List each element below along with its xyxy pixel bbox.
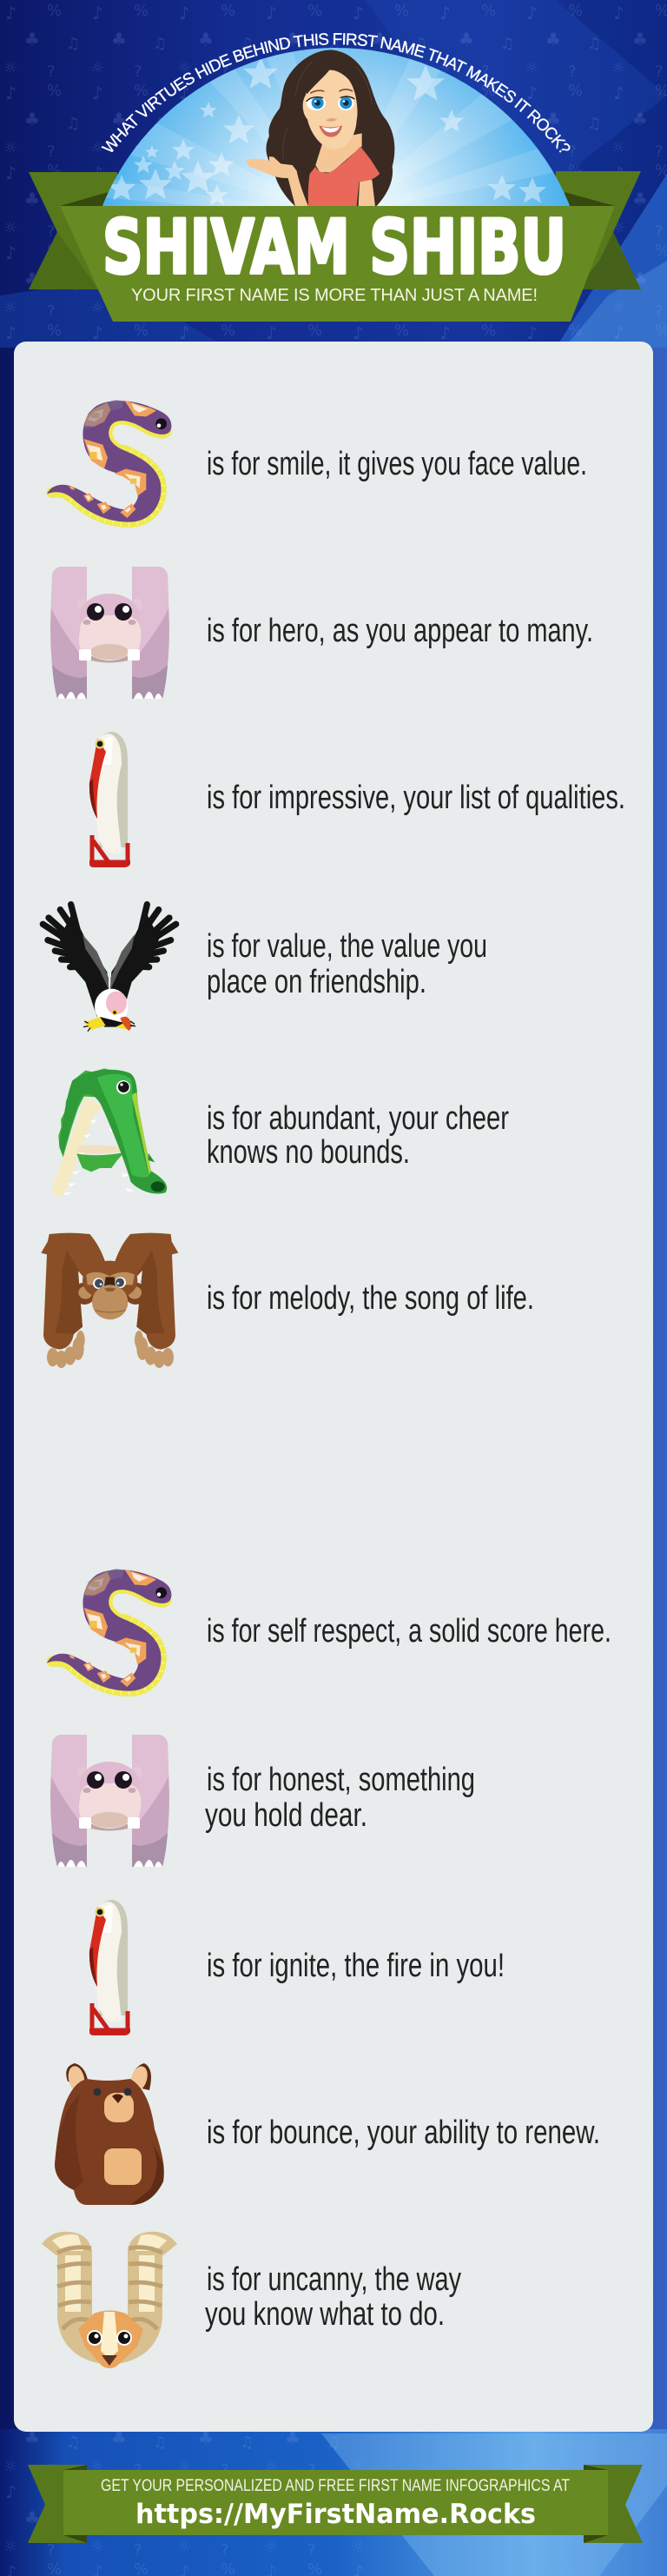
ribbon tails bbox=[29, 171, 641, 289]
row: M melody: is for melody, the song of life. bbox=[207, 1280, 534, 1317]
footer banner bbox=[28, 2465, 643, 2543]
sunburst dome bbox=[102, 48, 570, 206]
arm bbox=[246, 156, 308, 206]
row: H honest bbox=[50, 1735, 475, 1867]
row: H honest: is for honest, something bbox=[207, 1762, 475, 1798]
hair bbox=[266, 50, 394, 206]
row: U uncanny: is for uncanny, the way bbox=[207, 2261, 461, 2298]
neck and chest bbox=[315, 133, 362, 172]
row: U uncanny bbox=[42, 2232, 461, 2368]
row: I ignite: is for ignite, the fire in you! bbox=[207, 1948, 505, 1984]
row: H hero bbox=[50, 567, 593, 699]
row: A abundant bbox=[52, 1068, 509, 1197]
row: V value: is for value, the value you bbox=[207, 928, 487, 965]
row: S smile bbox=[47, 400, 587, 522]
footer line: GET YOUR PERSONALIZED AND FREE FIRST NAME INFOGRAPHICS AT bbox=[101, 2477, 570, 2495]
row: S self respect bbox=[47, 1569, 611, 1691]
nose bbox=[326, 118, 337, 122]
row: V value: place on friendship. bbox=[207, 964, 426, 1000]
shirt bbox=[308, 146, 380, 206]
row: H honest: you hold dear. bbox=[205, 1797, 367, 1834]
tagline: YOUR FIRST NAME IS MORE THAN JUST A NAME! bbox=[131, 286, 538, 305]
row: I impressive bbox=[89, 732, 625, 867]
title banner bbox=[60, 204, 615, 322]
row: I ignite bbox=[89, 1900, 505, 2035]
arc headline: WHAT VIRTUES HIDE BEHIND THIS FIRST NAME THAT MAKES IT ROCK? bbox=[101, 33, 570, 153]
row: A abundant: is for abundant, your cheer bbox=[207, 1100, 509, 1137]
eyes bbox=[307, 96, 326, 110]
row: A abundant: knows no bounds. bbox=[207, 1134, 410, 1171]
footer url: https://MyFirstName.Rocks bbox=[135, 2499, 536, 2530]
row: U uncanny: you know what to do. bbox=[205, 2296, 445, 2333]
face bbox=[303, 70, 358, 149]
main panel bbox=[14, 342, 653, 2432]
row: M melody bbox=[41, 1233, 534, 1368]
row: V value bbox=[43, 905, 487, 1032]
woman illustration bbox=[246, 50, 394, 206]
mouth bbox=[319, 125, 342, 137]
row: B bounce bbox=[55, 2063, 600, 2205]
